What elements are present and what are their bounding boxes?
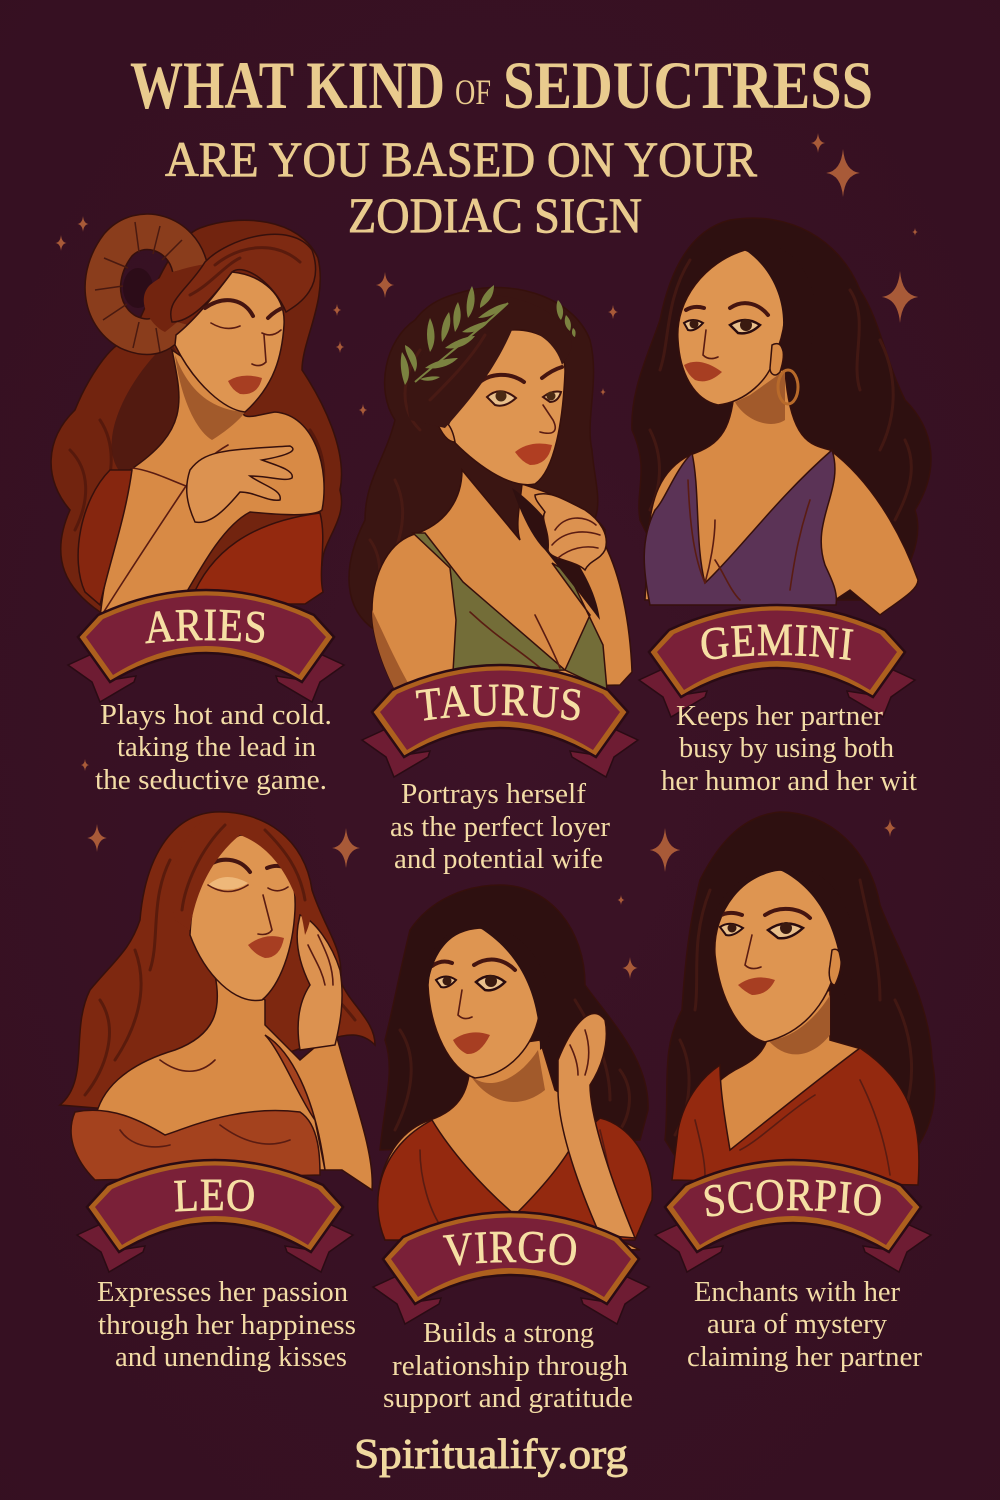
title: WHAT KIND — [130, 47, 445, 123]
decorative sparkles — [55, 133, 918, 979]
banner: scorpio: SCORPIO — [704, 1179, 881, 1216]
panel: scorpio portrait — [665, 812, 935, 1185]
banner: scorpio — [654, 1158, 932, 1273]
banner: aries — [67, 588, 345, 703]
text: aries description: the seductive game. — [95, 765, 327, 796]
text: gemini description: Keeps her partner — [676, 701, 884, 732]
banner: leo — [76, 1158, 354, 1273]
body — [645, 370, 918, 615]
text: scorpio description: Enchants with her — [694, 1277, 901, 1308]
body — [372, 470, 632, 690]
face — [678, 250, 785, 405]
face — [715, 870, 841, 1042]
text: leo description — [97, 1277, 356, 1373]
earring — [778, 370, 798, 404]
title: OF — [455, 72, 491, 112]
text: virgo description: Builds a strong — [423, 1318, 594, 1349]
text: virgo description: support and gratitude — [383, 1383, 633, 1414]
face — [428, 928, 541, 1078]
text: taurus description — [390, 779, 611, 875]
panel: aries portrait — [51, 220, 342, 618]
text: taurus description: Portrays herself — [401, 779, 587, 810]
dress — [413, 533, 607, 690]
laurel wreath — [401, 285, 576, 385]
title: ZODIAC SIGN — [348, 187, 642, 243]
face — [175, 272, 285, 412]
hand — [558, 1014, 635, 1238]
panel: leo portrait — [60, 812, 375, 1190]
banner: virgo: VIRGO — [442, 1232, 576, 1266]
text: scorpio description: claiming her partner — [687, 1342, 923, 1373]
hand — [297, 915, 342, 1050]
face — [436, 330, 565, 485]
text: taurus description: as the perfect loyer — [390, 812, 611, 843]
text: gemini description: busy by using both — [679, 733, 894, 764]
body — [378, 1040, 640, 1250]
face — [190, 835, 295, 1001]
panel: virgo portrait — [378, 885, 652, 1250]
panel: taurus portrait — [349, 285, 632, 690]
footer: website: Spiritualify.org — [354, 1432, 628, 1478]
text: virgo description: relationship through — [392, 1351, 628, 1382]
text: scorpio description: aura of mystery — [707, 1309, 887, 1340]
banner: leo: LEO — [174, 1180, 254, 1212]
text: gemini description — [661, 701, 917, 797]
text: gemini description: her humor and her wit — [661, 766, 917, 797]
panel: gemini portrait — [632, 218, 931, 615]
text: leo description: through her happiness — [98, 1310, 356, 1341]
hand — [187, 446, 293, 522]
banner: gemini: GEMINI — [701, 624, 854, 660]
body — [680, 990, 915, 1180]
title: SEDUCTRESS — [503, 47, 873, 123]
title — [130, 47, 873, 243]
text: taurus description: and potential wife — [394, 844, 603, 875]
text: leo description: Expresses her passion — [97, 1277, 348, 1308]
title: ARE YOU BASED ON YOUR — [165, 131, 758, 187]
text: aries description: Plays hot and cold. — [100, 700, 332, 731]
text: scorpio description — [687, 1277, 923, 1373]
text: aries description: taking the lead in — [117, 732, 316, 763]
banner: gemini — [638, 604, 916, 718]
banner: taurus: TAURUS — [416, 684, 580, 721]
icon: ram horn — [95, 222, 240, 352]
text: leo description: and unending kisses — [115, 1342, 347, 1373]
text: virgo description — [383, 1318, 633, 1414]
banner: aries: ARIES — [145, 610, 264, 644]
banner: virgo — [372, 1210, 650, 1325]
banner: taurus — [361, 664, 639, 778]
body — [90, 975, 372, 1190]
text: aries description — [95, 700, 332, 796]
hand — [535, 494, 606, 570]
